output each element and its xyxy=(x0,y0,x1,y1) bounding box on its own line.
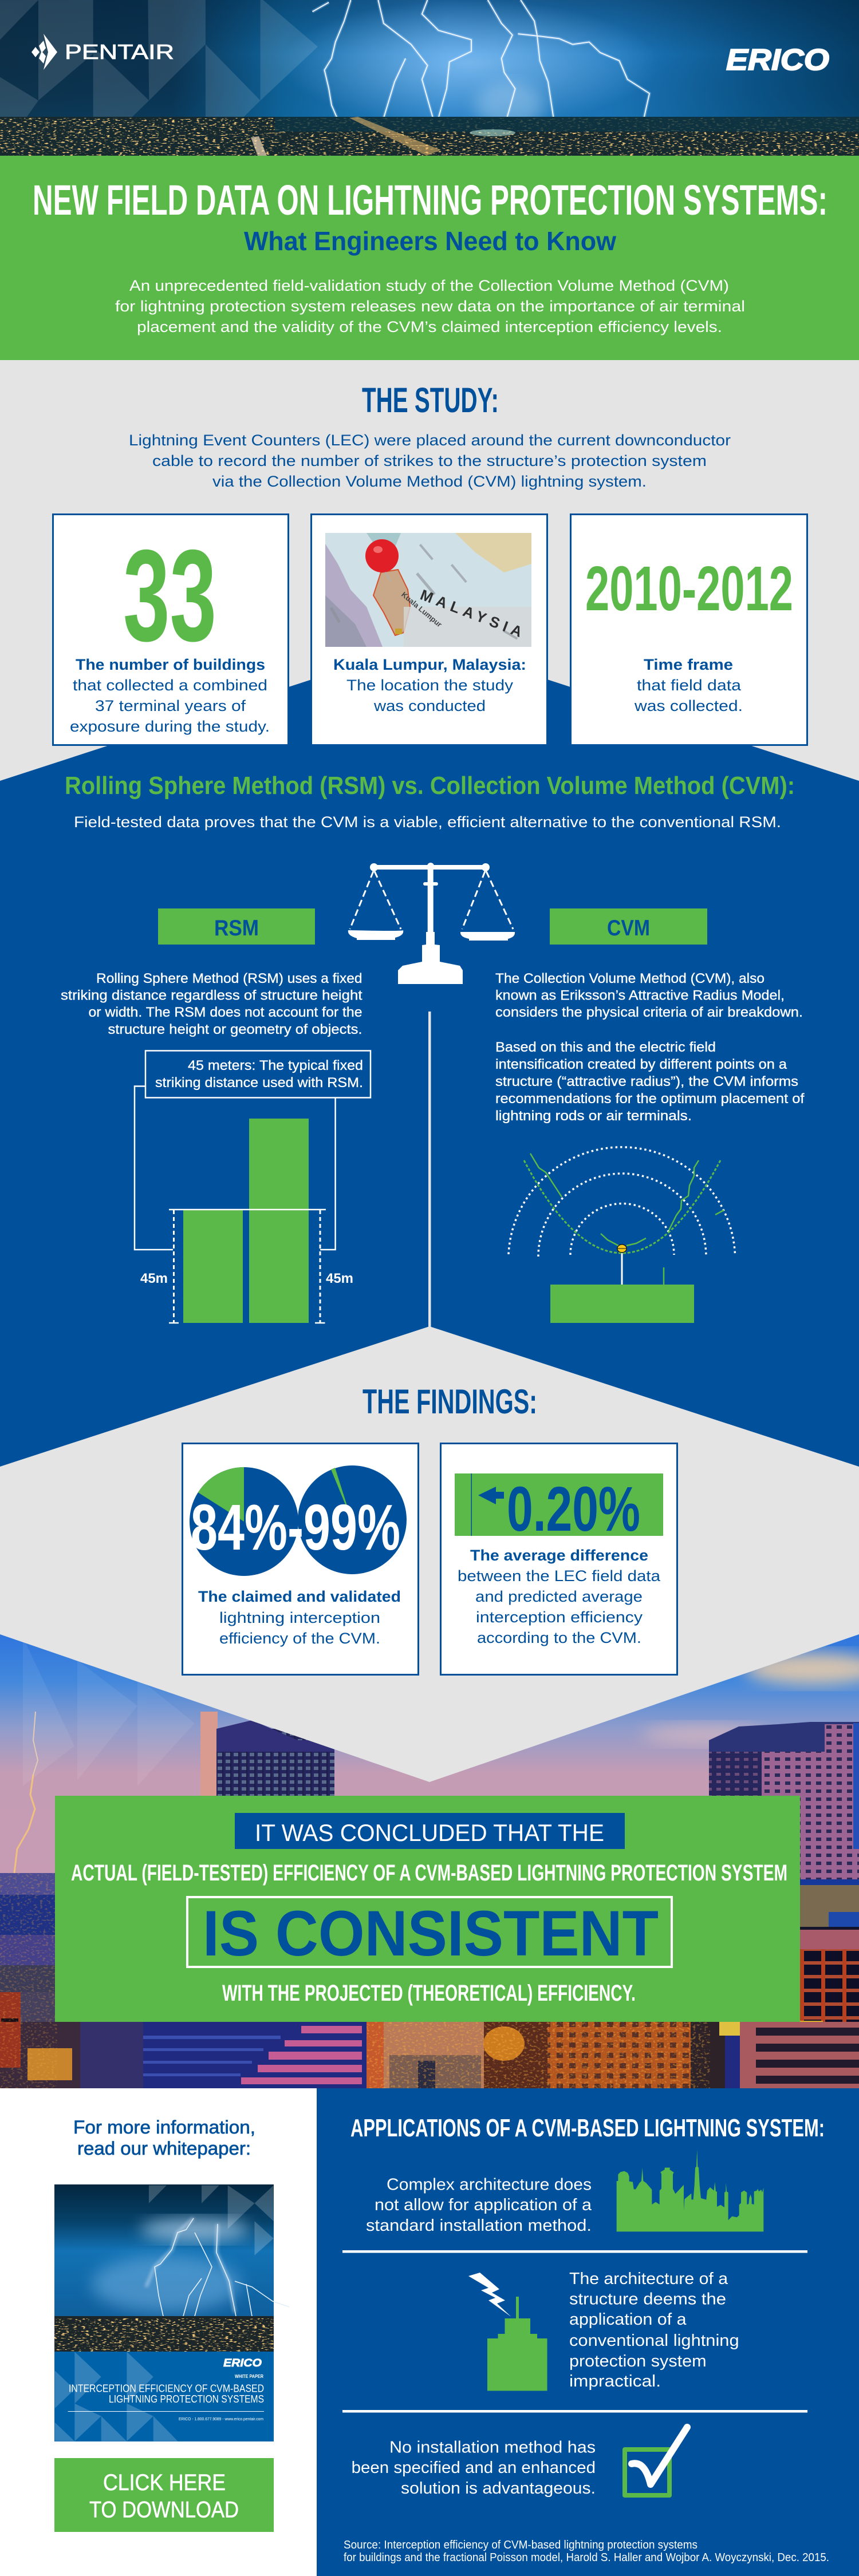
card text: The average difference xyxy=(470,1547,648,1564)
icon: building struck by lightning xyxy=(468,2273,547,2391)
card text: between the LEC field data xyxy=(458,1567,661,1585)
chart: 99% pie xyxy=(298,1465,407,1574)
diagram: buildings with 45m striking distance: 45m xyxy=(326,1271,353,1286)
card: time frame xyxy=(570,514,807,745)
heading: the findings: THE FINDINGS: xyxy=(362,1382,537,1421)
percentage range: 84%-99% xyxy=(191,1491,400,1563)
RSM description: or width. The RSM does not account for the xyxy=(88,1005,362,1020)
logo: Pentair xyxy=(31,34,174,70)
diagram: attractive radius arcs xyxy=(509,1147,735,1323)
application 3 text: been specified and an enhanced xyxy=(352,2459,596,2477)
panel: conclusion xyxy=(55,1796,800,2022)
gray page background xyxy=(0,360,859,1734)
big number 33: 33 xyxy=(123,523,216,669)
source note: for buildings and the fractional Poisson model, Harold S. Haller and Wojbor A. Woyczynski, Dec. 2015. xyxy=(344,2551,829,2564)
left tall building xyxy=(216,1729,334,1803)
application 2 text: structure deems the xyxy=(569,2290,726,2309)
card text: that collected a combined xyxy=(73,677,267,694)
logo: Erico: ERICO xyxy=(726,44,829,77)
card: 33 buildings xyxy=(53,514,289,745)
whitepaper cover xyxy=(54,2184,289,2441)
card: interception efficiency xyxy=(182,1444,418,1675)
comparison subheading: Field-tested data proves that the CVM is a viable, efficient alternative to the conventional RSM. xyxy=(74,813,781,831)
header photo: lightning over city xyxy=(0,0,859,156)
study description: via the Collection Volume Method (CVM) lightning system. xyxy=(212,473,647,490)
application 2 text xyxy=(569,2270,739,2391)
CVM description: The Collection Volume Method (CVM), also xyxy=(495,971,765,986)
chart: 84% pie xyxy=(190,1467,298,1576)
conclusion lead-in: IT WAS CONCLUDED THAT THE xyxy=(255,1819,604,1846)
RSM description: Rolling Sphere Method (RSM) uses a fixed xyxy=(96,971,362,986)
diagram: buildings with 45m striking distance xyxy=(135,1086,353,1323)
callout: 45 meters xyxy=(145,1051,371,1098)
application 3 text xyxy=(352,2439,596,2498)
whitepaper heading: For more information, xyxy=(73,2117,255,2138)
application 1 text: not allow for application of a xyxy=(375,2196,592,2214)
CVM description: lightning rods or air terminals. xyxy=(495,1108,692,1124)
button: download: TO DOWNLOAD xyxy=(89,2498,239,2523)
card text: Kuala Lumpur, Malaysia: xyxy=(333,656,526,673)
button: download: CLICK HERE xyxy=(103,2470,226,2495)
city photo background xyxy=(0,1626,859,2088)
CVM description xyxy=(495,971,805,1124)
whitepaper cover: ERICO xyxy=(223,2357,262,2369)
RSM label: RSM xyxy=(214,916,259,941)
CVM description: intensification created by different points on a xyxy=(495,1057,787,1072)
card text xyxy=(70,656,270,735)
stat: 0.20% with arrow: 0.20% xyxy=(507,1474,640,1544)
subtitle: What Engineers Need to Know xyxy=(244,226,616,256)
whitepaper cover: LIGHTNING PROTECTION SYSTEMS xyxy=(109,2393,264,2405)
conclusion highlight: IS CONSISTENT xyxy=(203,1898,659,1969)
card text: interception efficiency xyxy=(476,1609,643,1626)
card text xyxy=(198,1588,401,1647)
study description: Lightning Event Counters (LEC) were placed around the current downconductor xyxy=(129,432,731,449)
source note xyxy=(344,2539,829,2564)
application 2 text: conventional lightning xyxy=(569,2332,739,2350)
CVM description: known as Eriksson’s Attractive Radius Model, xyxy=(495,988,785,1003)
heading: the study: THE STUDY: xyxy=(362,381,499,420)
source note: Source: Interception efficiency of CVM-based lightning protection systems xyxy=(344,2539,698,2551)
application 1 text: Complex architecture does xyxy=(387,2175,592,2194)
panel: CVM xyxy=(495,908,805,1323)
whitepaper heading: read our whitepaper: xyxy=(77,2138,251,2159)
icon: balance scale xyxy=(348,863,515,984)
card text xyxy=(458,1547,661,1646)
panel: applications xyxy=(317,2088,859,2576)
icon: check box xyxy=(625,2427,687,2495)
map of Malaysia with red pin: MALAYSIA xyxy=(418,586,529,642)
card text: exposure during the study. xyxy=(70,718,270,735)
RSM label xyxy=(158,908,315,945)
application 2 text: The architecture of a xyxy=(569,2270,728,2288)
callout: 45 meters: 45 meters: The typical fixed xyxy=(188,1058,363,1073)
CVM label: CVM xyxy=(607,916,650,941)
icon: city skyline xyxy=(617,2150,763,2231)
stat: 0.20% with arrow xyxy=(455,1473,663,1544)
card text: 37 terminal years of xyxy=(95,697,246,714)
CVM description: considers the physical criteria of air breakdown. xyxy=(495,1005,803,1020)
card text: was conducted xyxy=(373,697,486,714)
application 3 text: solution is advantageous. xyxy=(401,2479,596,2498)
application 2 text: protection system xyxy=(569,2352,707,2370)
whitepaper cover: ERICO - 1.800.677.9089 - www.erico.pentair.com xyxy=(179,2416,263,2421)
left side buildings xyxy=(0,1873,57,1895)
card text: The claimed and validated xyxy=(198,1588,401,1605)
panel: RSM xyxy=(61,908,371,1323)
intro paragraph xyxy=(115,277,745,335)
button: download xyxy=(54,2458,274,2532)
card text: that field data xyxy=(637,677,742,694)
gray findings diamond xyxy=(0,1326,859,1782)
conclusion lead-in xyxy=(235,1813,625,1849)
study description: cable to record the number of strikes to the structure’s protection system xyxy=(152,452,707,469)
CVM description: Based on this and the electric field xyxy=(495,1040,716,1055)
card: location xyxy=(312,514,547,745)
card text: The number of buildings xyxy=(76,656,265,673)
RSM description: striking distance regardless of structure height xyxy=(61,988,362,1003)
card text: The location the study xyxy=(346,677,514,694)
card text: lightning interception xyxy=(219,1609,380,1626)
right tall building xyxy=(709,1740,859,1883)
whitepaper cover: INTERCEPTION EFFICIENCY OF CVM-BASED xyxy=(69,2383,264,2395)
map of Malaysia with red pin xyxy=(325,533,531,647)
heading: RSM vs CVM: Rolling Sphere Method (RSM) vs. Collection Volume Method (CVM): xyxy=(65,772,795,800)
blue RSM vs CVM background shape xyxy=(0,641,859,1488)
application 2 text: impractical. xyxy=(569,2372,661,2391)
translucent triangles over city xyxy=(23,1637,195,1786)
RSM description xyxy=(61,971,362,1037)
RSM description: structure height or geometry of objects. xyxy=(108,1022,362,1037)
card text: and predicted average xyxy=(475,1588,643,1605)
card text xyxy=(333,656,526,714)
lightning over city xyxy=(14,1775,35,1873)
panel: title band xyxy=(0,156,859,360)
panel: whitepaper xyxy=(0,2088,317,2576)
center divider line xyxy=(428,1012,431,1327)
card text: efficiency of the CVM. xyxy=(219,1630,380,1647)
CVM description: structure (“attractive radius”), the CVM informs xyxy=(495,1074,798,1089)
logo: Pentair: PENTAIR xyxy=(65,40,174,64)
study description xyxy=(129,432,731,490)
CVM label xyxy=(550,908,707,945)
application 3 text: No installation method has xyxy=(389,2439,596,2457)
card text: was collected. xyxy=(634,697,743,714)
application 1 text xyxy=(366,2175,592,2235)
application 1 text: standard installation method. xyxy=(366,2217,592,2235)
CVM description: recommendations for the optimum placement of xyxy=(495,1091,805,1107)
card text: Time frame xyxy=(644,656,733,673)
diagram: buildings with 45m striking distance: 45m xyxy=(140,1271,168,1286)
application 2 text: application of a xyxy=(569,2310,687,2329)
map of Malaysia with red pin: Kuala Lumpur xyxy=(400,590,444,629)
whitepaper heading xyxy=(73,2117,255,2159)
conclusion line 2: WITH THE PROJECTED (THEORETICAL) EFFICIENCY. xyxy=(222,1981,636,2006)
intro paragraph: placement and the validity of the CVM’s claimed interception efficiency levels. xyxy=(137,318,722,335)
card text: according to the CVM. xyxy=(477,1629,641,1646)
callout: 45 meters: striking distance used with RSM. xyxy=(155,1075,363,1091)
card: average difference xyxy=(441,1444,677,1675)
intro paragraph: for lightning protection system releases new data on the importance of air terminal xyxy=(115,298,745,315)
whitepaper cover: WHITE PAPER xyxy=(235,2373,263,2379)
intro paragraph: An unprecedented field-validation study of the Collection Volume Method (CVM) xyxy=(129,277,729,294)
bottom city band xyxy=(0,2022,859,2088)
card text xyxy=(634,656,743,714)
